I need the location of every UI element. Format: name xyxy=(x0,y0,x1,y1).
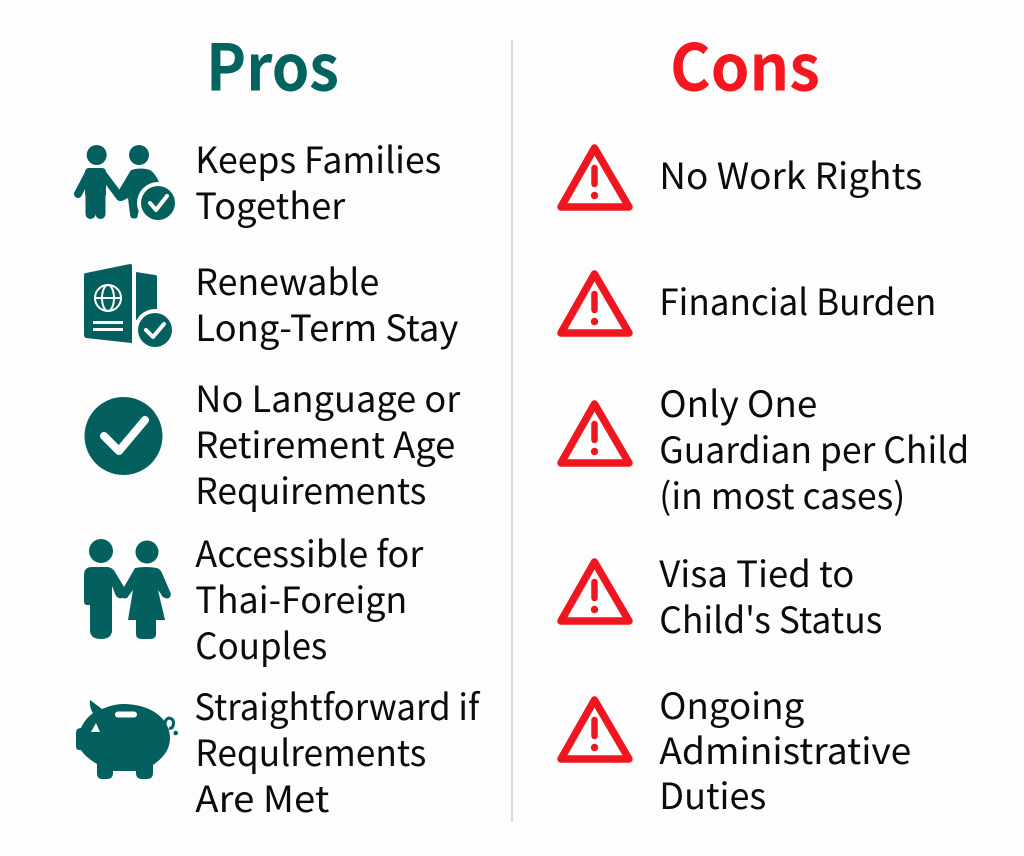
text: Visa Tied to Child's Status: Visa Tied to xyxy=(659,546,854,598)
text: Visa Tied to Child's Status xyxy=(659,546,882,644)
text: No Language or Retirement Age Requirements: Requirements xyxy=(195,463,426,515)
text: Only One Guardian per Child (in most cases): Guardian per Child xyxy=(659,422,969,474)
text: No Language or Retirement Age Requirements: No Language or xyxy=(195,371,461,423)
text: No Work Rights: No Work Rights xyxy=(659,148,922,200)
text: Only One Guardian per Child (in most cases): (in most cases) xyxy=(659,468,905,520)
icon: warning 3 xyxy=(561,404,629,463)
icon: check circle xyxy=(84,397,162,475)
text: Only One Guardian per Child (in most cases) xyxy=(659,376,969,520)
text: Straightforward if Requlrements Are Met: Requlrements xyxy=(195,725,426,777)
text: Ongoing Administrative Duties: Administrative xyxy=(659,723,911,775)
text: Renewable Long-Term Stay: Long-Term Stay xyxy=(195,300,459,352)
text: No Language or Retirement Age Requirements xyxy=(195,371,461,515)
icon: warning 2 xyxy=(561,274,629,333)
icon: couple xyxy=(84,539,171,639)
text: Financial Burden: Financial Burden xyxy=(659,274,936,326)
text: Visa Tied to Child's Status: Child's Status xyxy=(659,592,882,644)
icon: warning 1 xyxy=(561,148,629,207)
text: Renewable Long-Term Stay: Renewable xyxy=(195,254,379,306)
text: No Language or Retirement Age Requirements: Retirement Age xyxy=(195,417,455,469)
icon: warning 4 xyxy=(561,562,629,621)
text: Keeps Families Together xyxy=(195,132,441,230)
text: Keeps Families Together: Keeps Families xyxy=(195,132,441,184)
text: Straightforward if Requlrements Are Met xyxy=(194,679,481,823)
heading: Pros: Pros xyxy=(206,18,339,110)
text: Only One Guardian per Child (in most cases): Only One xyxy=(659,376,817,428)
icon: warning 5 xyxy=(561,700,629,759)
text: Accessible for Thai-Foreign Couples: Couples xyxy=(195,618,327,670)
text: Straightforward if Requlrements Are Met: Straightforward if xyxy=(194,679,481,731)
text: Ongoing Administrative Duties xyxy=(659,678,911,820)
icon: family with check xyxy=(78,145,179,224)
text: Accessible for Thai-Foreign Couples: Accessible for xyxy=(195,526,424,578)
text: Ongoing Administrative Duties: Duties xyxy=(659,768,766,820)
text: Ongoing Administrative Duties: Ongoing xyxy=(659,678,804,730)
icon: piggy bank xyxy=(76,700,178,779)
text: Renewable Long-Term Stay xyxy=(195,254,459,352)
text: Accessible for Thai-Foreign Couples xyxy=(195,526,424,670)
text: Keeps Families Together: Together xyxy=(195,178,346,230)
text: Straightforward if Requlrements Are Met: Are Met xyxy=(195,771,330,823)
icon: passport with check xyxy=(84,264,176,351)
heading: Cons: Cons xyxy=(670,18,820,110)
text: Accessible for Thai-Foreign Couples: Thai-Foreign xyxy=(195,572,407,624)
